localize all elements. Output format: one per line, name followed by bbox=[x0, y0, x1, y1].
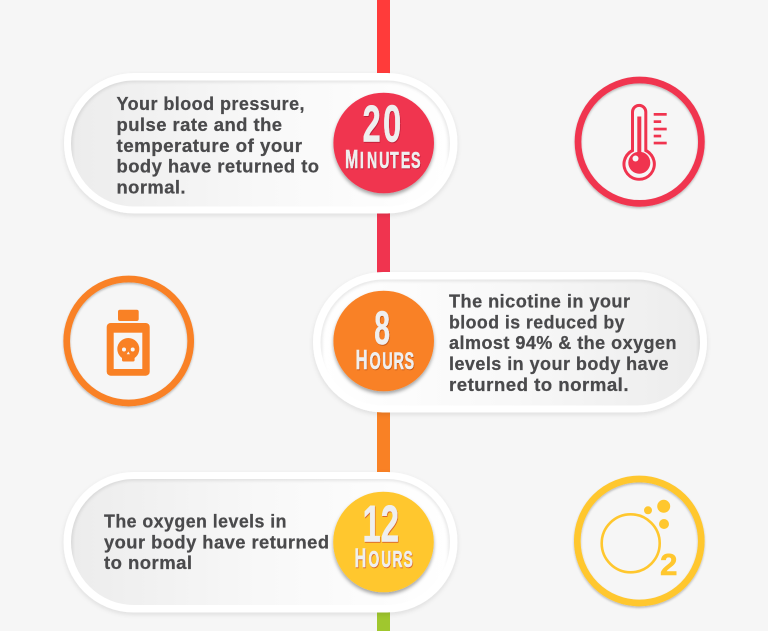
text: 8 hours description: almost 94% & the oxygen bbox=[449, 333, 677, 353]
badge: 20 minutes: 20 bbox=[362, 96, 401, 153]
text: 20 minutes description bbox=[116, 94, 320, 197]
timeline line bbox=[377, 0, 390, 631]
badge: 8 hours: OURS bbox=[369, 348, 414, 375]
badge: 12 hours: OURS bbox=[368, 548, 413, 573]
text: 20 minutes description: temperature of your bbox=[116, 136, 302, 156]
text: 12 hours description: your body have returned bbox=[104, 532, 330, 552]
text: 12 hours description bbox=[104, 511, 330, 573]
text: 20 minutes description: Your blood pressure, bbox=[116, 94, 305, 114]
icon: thermometer bbox=[578, 80, 701, 203]
icon: oxygen O2 bbox=[577, 479, 701, 603]
badge: 20 minutes: INUTES bbox=[360, 149, 421, 174]
badge: 12 hours bbox=[333, 492, 434, 592]
text: 20 minutes description: body have returned to bbox=[116, 157, 320, 177]
badge: 12 hours: H bbox=[354, 543, 366, 573]
badge: 12 hours: 12 bbox=[362, 496, 399, 553]
text: 8 hours description: blood is reduced by bbox=[449, 312, 625, 332]
text: 8 hours description: levels in your body have bbox=[449, 354, 669, 374]
text: 20 minutes description: normal. bbox=[116, 177, 186, 197]
text: 8 hours description: returned to normal. bbox=[449, 375, 629, 395]
panel: 8 hours bbox=[313, 272, 707, 416]
panel: 20 minutes bbox=[64, 73, 458, 216]
text: 20 minutes description: pulse rate and the bbox=[116, 115, 282, 135]
text: 12 hours description: The oxygen levels in bbox=[104, 511, 287, 531]
panel: 12 hours bbox=[64, 472, 458, 615]
text: 12 hours description: to normal bbox=[104, 553, 192, 573]
badge: 8 hours: 8 bbox=[374, 303, 390, 355]
icon: poison bottle bbox=[67, 279, 191, 403]
icon: oxygen O2: 2 bbox=[660, 547, 678, 582]
badge: 20 minutes: M bbox=[345, 144, 358, 174]
badge: 20 minutes bbox=[333, 93, 434, 193]
text: 8 hours description bbox=[449, 292, 677, 395]
badge: 8 hours: H bbox=[356, 344, 368, 375]
badge: 8 hours bbox=[333, 291, 434, 391]
text: 8 hours description: The nicotine in your bbox=[449, 292, 630, 312]
